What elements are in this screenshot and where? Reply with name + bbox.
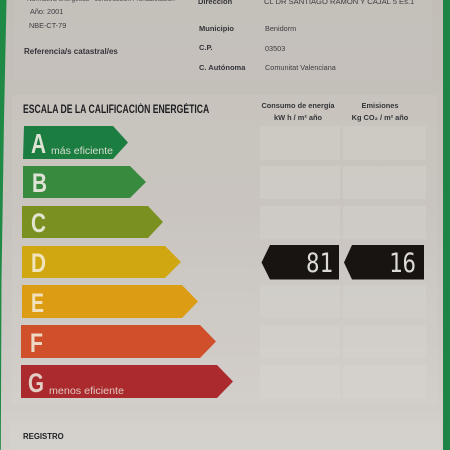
arrow G: G xyxy=(28,368,44,398)
arrow B xyxy=(23,166,146,198)
rating marker: emissions 16 xyxy=(344,245,424,280)
column heading: emissions xyxy=(352,101,408,122)
panel: register xyxy=(10,420,440,450)
value: postal code: 03503 xyxy=(265,44,285,53)
value: region: Comunitat Valenciana xyxy=(265,63,336,72)
arrow A: más eficiente xyxy=(51,146,113,157)
label: region: C. Autónoma xyxy=(199,63,245,72)
arrow C xyxy=(22,206,163,238)
text: year: Año: 2001 xyxy=(30,7,63,16)
panel: address xyxy=(191,0,432,80)
heading: energy scale: ESCALA DE LA CALIFICACIÓN ENERGÉTICA xyxy=(23,104,209,116)
arrow D xyxy=(22,246,181,278)
panel: energy rating scale xyxy=(12,95,437,405)
heading: register: REGISTRO xyxy=(23,432,64,440)
value: municipality: Benidorm xyxy=(265,24,296,33)
arrow E: E xyxy=(31,288,44,318)
arrow A: A xyxy=(31,128,46,159)
column heading: energy consumption: kW h / m² año xyxy=(274,113,322,122)
panel: building identification xyxy=(14,0,191,80)
column heading: emissions: Emisiones xyxy=(362,101,398,110)
label: cadastral reference: Referencia/s catastral/es xyxy=(24,47,118,56)
right green border xyxy=(443,0,450,450)
column heading: energy consumption xyxy=(261,101,335,122)
table cells: consumption and emissions xyxy=(260,126,426,398)
label: postal code: C.P. xyxy=(199,43,213,52)
rating arrows chart xyxy=(21,126,233,398)
arrow A xyxy=(23,126,128,159)
rating marker: emissions 16: 16 xyxy=(389,248,416,279)
arrow F: F xyxy=(30,328,43,358)
arrow F xyxy=(21,325,216,358)
arrow G: menos eficiente xyxy=(49,386,124,397)
arrow C: C xyxy=(31,208,46,238)
rating marker: consumption 81 xyxy=(262,245,339,280)
arrow B: B xyxy=(32,168,47,198)
arrow D: D xyxy=(31,248,46,278)
column heading: energy consumption: Consumo de energía xyxy=(261,101,335,110)
arrow E xyxy=(22,285,198,318)
column heading: emissions: Kg CO₂ / m² año xyxy=(352,113,408,122)
label: municipality: Municipio xyxy=(199,24,234,33)
text: standard: NBE-CT-79 xyxy=(29,21,66,30)
rating marker: consumption 81: 81 xyxy=(306,248,333,279)
arrow G xyxy=(21,365,233,398)
left green border xyxy=(0,0,6,450)
